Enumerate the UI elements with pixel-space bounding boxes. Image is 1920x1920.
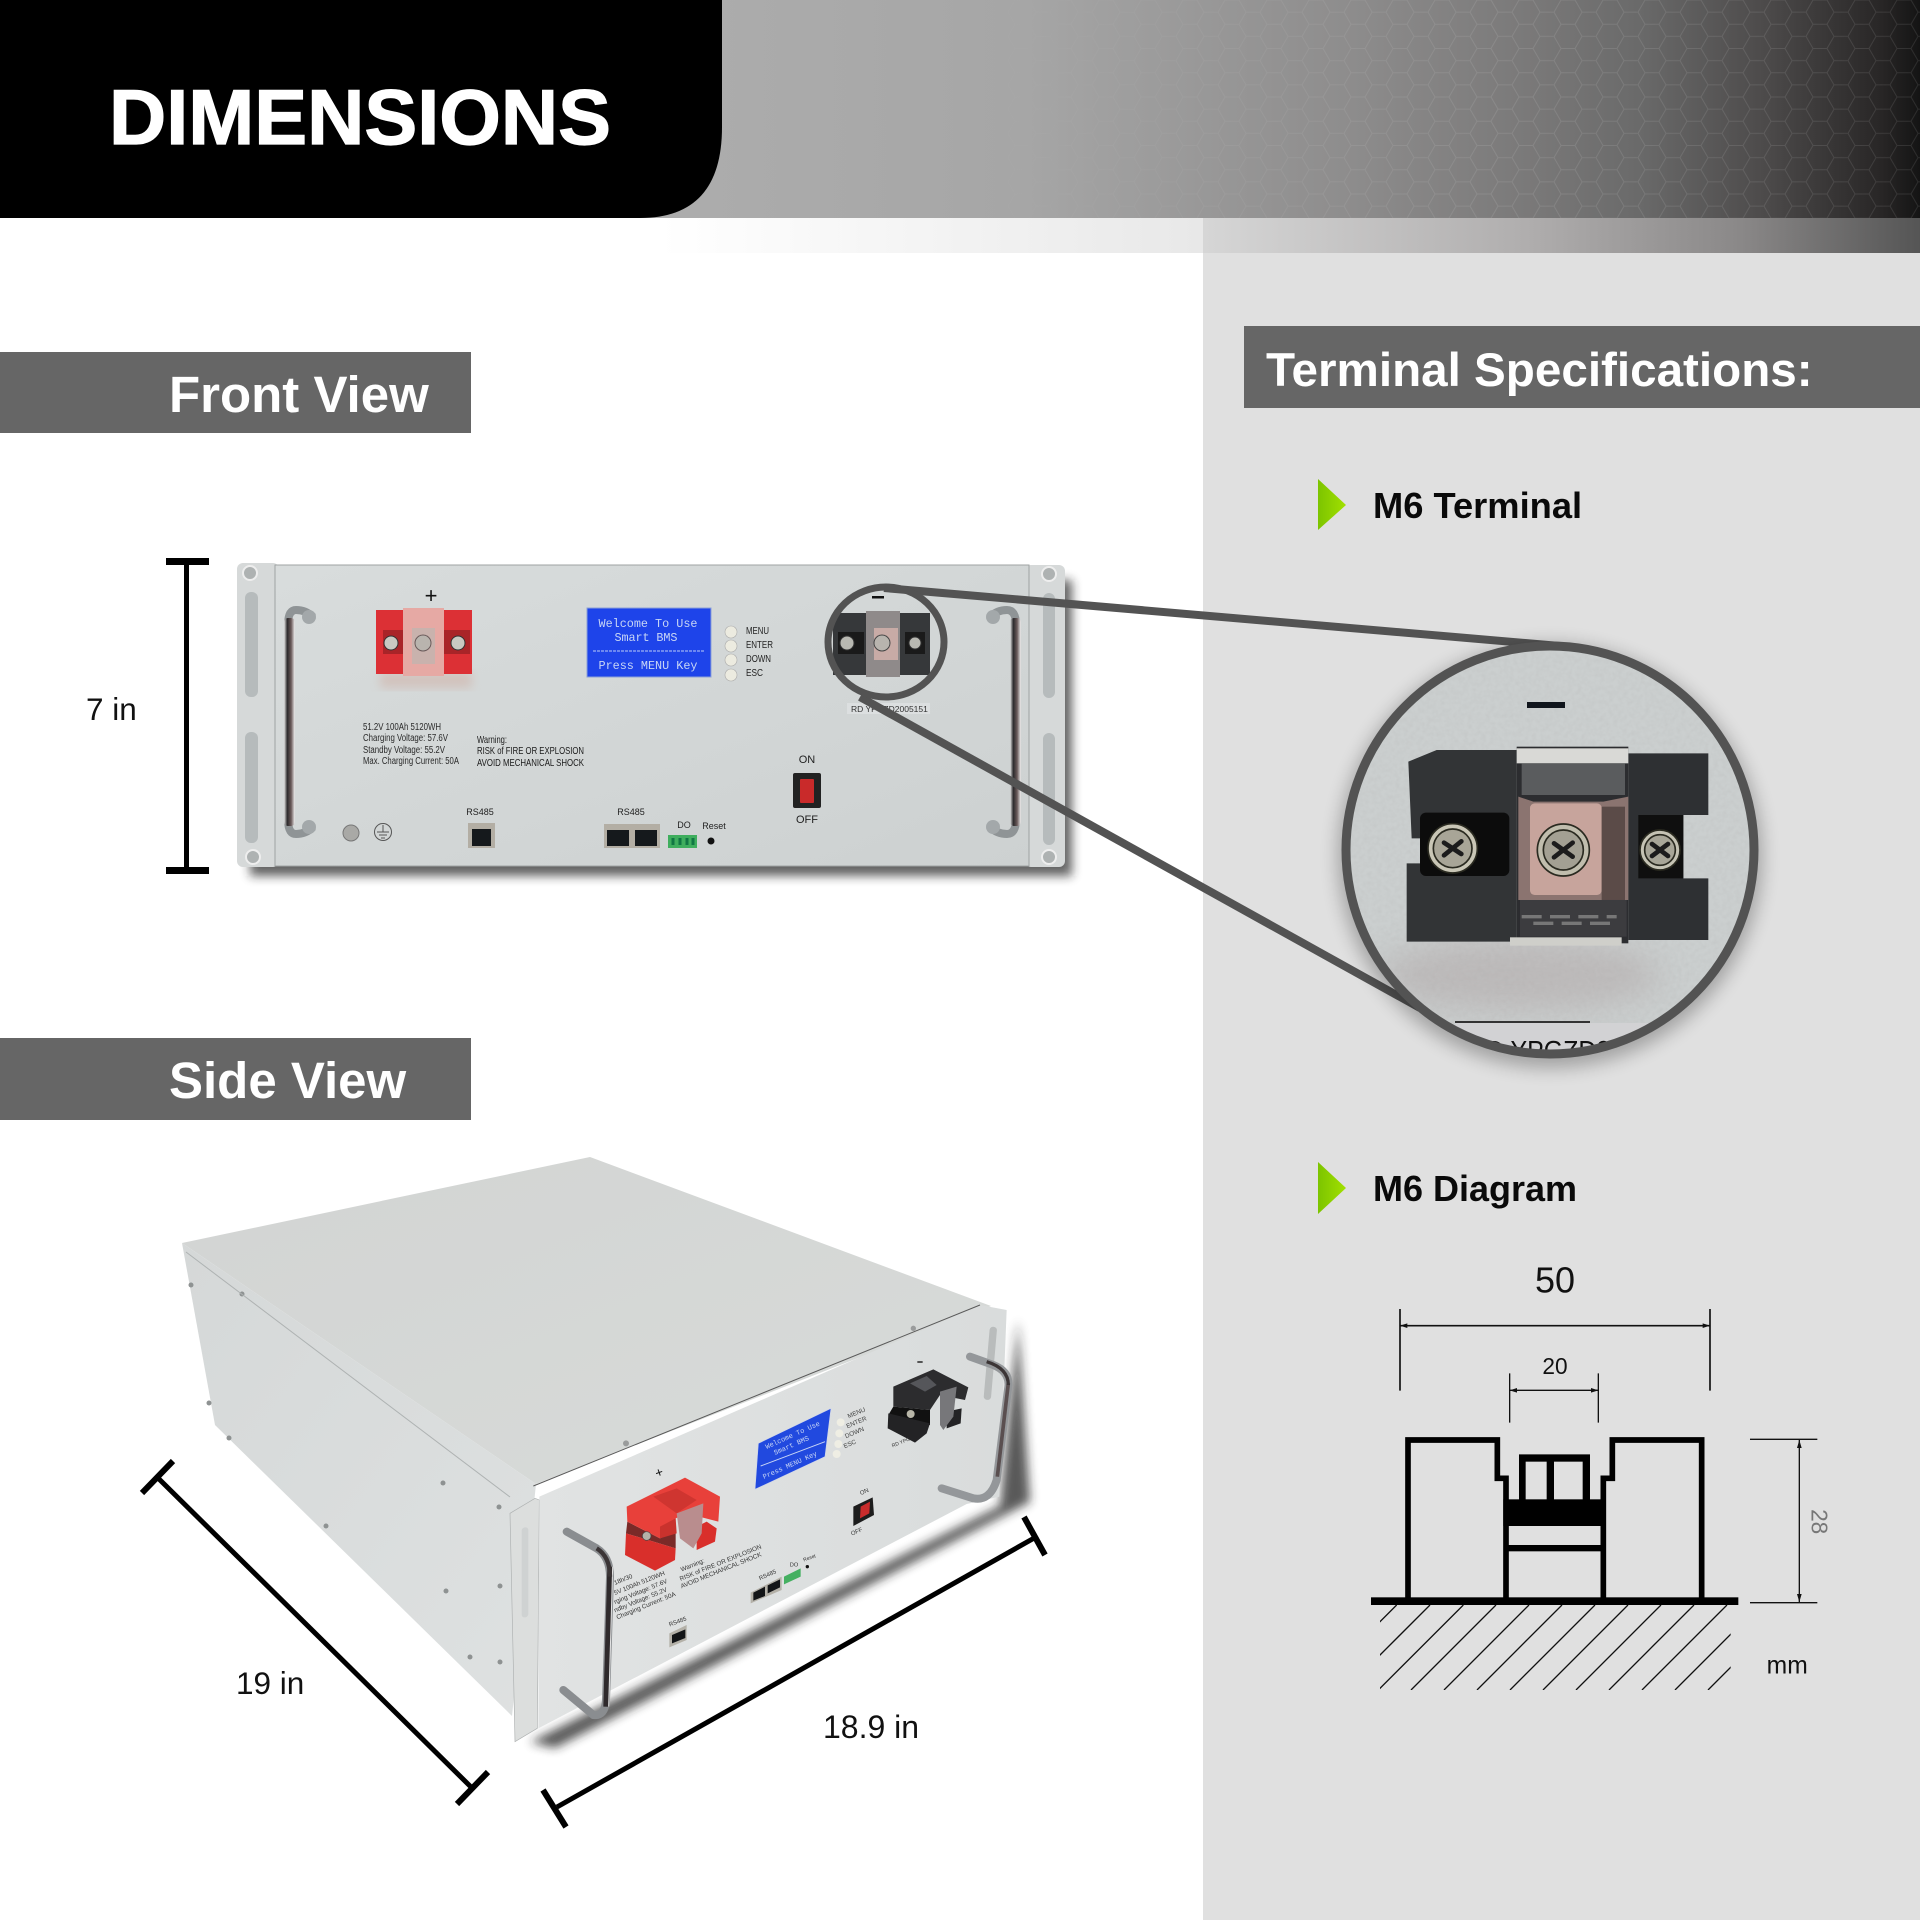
specification text: 51.2V 100Ah 5120WH [363,722,441,733]
DO connector: DO [677,820,691,830]
title block [0,0,722,218]
menu buttons: MENU [746,626,769,637]
positive terminal: + [425,583,437,608]
depth dimension: 19 in [142,1461,488,1804]
ground screw and symbol [343,824,392,841]
menu buttons: DOWN [746,654,771,665]
right handle [942,1357,1008,1499]
bullet: M6 diagram: M6 Diagram [1373,1168,1577,1209]
warning text: RISK of FIRE OR EXPLOSION [477,745,584,757]
RS485 port [668,1616,688,1647]
power switch: ON [799,754,815,766]
front flange [510,1498,539,1742]
specification text: Charging Voltage: 57.6V [363,733,448,744]
depth dimension: 19 in: 19 in [236,1665,304,1701]
menu buttons [725,626,773,681]
RS485 port [466,807,495,848]
side fasteners [188,1282,502,1664]
side face [182,1243,536,1716]
warning text: RISK of FIRE OR EXPLOSION [679,1543,763,1583]
dual RS485 ports [604,807,660,848]
LCD screen: Welcome To Use [598,617,698,631]
positive terminal [376,583,472,688]
power switch: ON [859,1488,870,1497]
ground hatching [1380,1605,1731,1690]
heading: front view: Front View [169,366,429,423]
overall width dimension: 50 [1535,1260,1575,1301]
warning text [477,734,584,769]
dual RS485 ports: RS485 [617,807,645,817]
specification text [613,1570,678,1621]
dual RS485 ports [751,1569,782,1603]
power switch [850,1488,874,1538]
specification text [363,722,459,767]
menu buttons: MENU [847,1406,867,1420]
zoom callout lines [860,588,1560,1008]
front face [538,1305,1007,1728]
specification text: 18h/30 [613,1573,634,1587]
M6 terminal dimension diagram [1371,1267,1828,1690]
left handle [284,610,316,834]
warning text: Warning: [477,734,507,746]
LCD screen: Smart BMS [773,1435,811,1458]
left handle [563,1532,613,1715]
zoom source circle [828,587,944,697]
height dimension [1750,1439,1833,1603]
negative terminal [888,1361,968,1443]
header band [640,0,1920,253]
specification text: Charging Current: 50A [615,1591,678,1621]
negative terminal [833,596,930,677]
width dimension: 18.9 in [543,1517,1045,1827]
LCD screen: Press MENU Key [762,1451,819,1482]
warning text: Warning: [680,1558,706,1574]
height dimension: 28 [1807,1509,1833,1534]
cast shadow [530,1320,1030,1748]
RS485 port: RS485 [466,807,494,817]
DO connector and reset: Reset [803,1553,817,1563]
warning text: AVOID MECHANICAL SHOCK [680,1551,763,1590]
menu buttons: ESC [843,1438,858,1450]
bullet: M6 diagram [1318,1162,1577,1214]
title: DIMENSIONS [109,73,611,161]
side view battery [182,1157,1030,1748]
reset button [702,821,726,844]
power switch: OFF [850,1527,864,1538]
menu buttons [833,1406,868,1458]
right handle [986,610,1021,834]
power switch: OFF [796,814,818,826]
LCD screen: Press MENU Key [598,659,698,673]
front plate [275,565,1029,866]
specification text: rging Voltage: 57.6V [613,1578,669,1606]
serial label magnified: RD YPGZD200 [1468,1035,1638,1066]
heading: front view [0,352,471,433]
overall width dimension [1400,1260,1710,1391]
width dimension: 18.9 in: 18.9 in [823,1709,919,1745]
reset button: Reset [702,821,726,831]
top face [182,1157,991,1484]
magnified terminal photo [1338,640,1762,1068]
heading: side view [0,1038,471,1120]
specification text: 5V 100Ah 5120WH [613,1570,666,1597]
DO connector and reset: DO [790,1563,799,1569]
power switch [793,754,821,826]
positive terminal: + [653,1464,666,1481]
panel: terminal specifications background [1203,253,1920,1920]
height dimension: 7 in [86,558,209,874]
height dimension: 7 in: 7 in [86,691,137,727]
menu buttons: ENTER [845,1415,868,1430]
terminal block [1407,747,1708,946]
DO connector and reset [784,1553,817,1584]
serial label: RD YPGZD2005151 [851,704,928,714]
minus mark [1527,702,1565,708]
centre width dimension [1510,1353,1598,1423]
positive terminal [625,1464,720,1571]
centre width dimension: 20 [1542,1353,1568,1379]
LCD screen [587,608,711,677]
warning text: AVOID MECHANICAL SHOCK [477,757,584,769]
serial tag: RD YPG [891,1436,911,1449]
heading: terminal specifications [1244,326,1920,408]
terminal section [1371,1440,1738,1605]
heading: side view: Side View [169,1052,407,1109]
bullet: M6 terminal [1318,479,1582,530]
LCD screen: Welcome To Use [765,1421,821,1452]
LCD screen [755,1408,831,1489]
specification text: Max. Charging Current: 50A [363,756,459,767]
menu buttons: ESC [746,668,763,679]
serial label magnified [1455,1021,1648,1050]
menu buttons: ENTER [746,640,773,651]
LCD screen: Smart BMS [614,631,678,645]
front view battery [237,563,1072,876]
heading: terminal specifications: Terminal Specifications: [1266,344,1813,397]
mounting ears [237,563,1065,867]
dual RS485 ports: RS485 [758,1569,778,1582]
screws [1428,824,1680,876]
menu buttons: DOWN [844,1426,866,1440]
specification text: ndby Voltage: 55.2V [613,1586,669,1614]
RS485 port: RS485 [668,1616,688,1628]
specification text: Standby Voltage: 55.2V [363,745,445,756]
DO connector [668,820,697,848]
bullet: M6 terminal: M6 Terminal [1373,485,1582,526]
unit: mm [1767,1652,1808,1679]
